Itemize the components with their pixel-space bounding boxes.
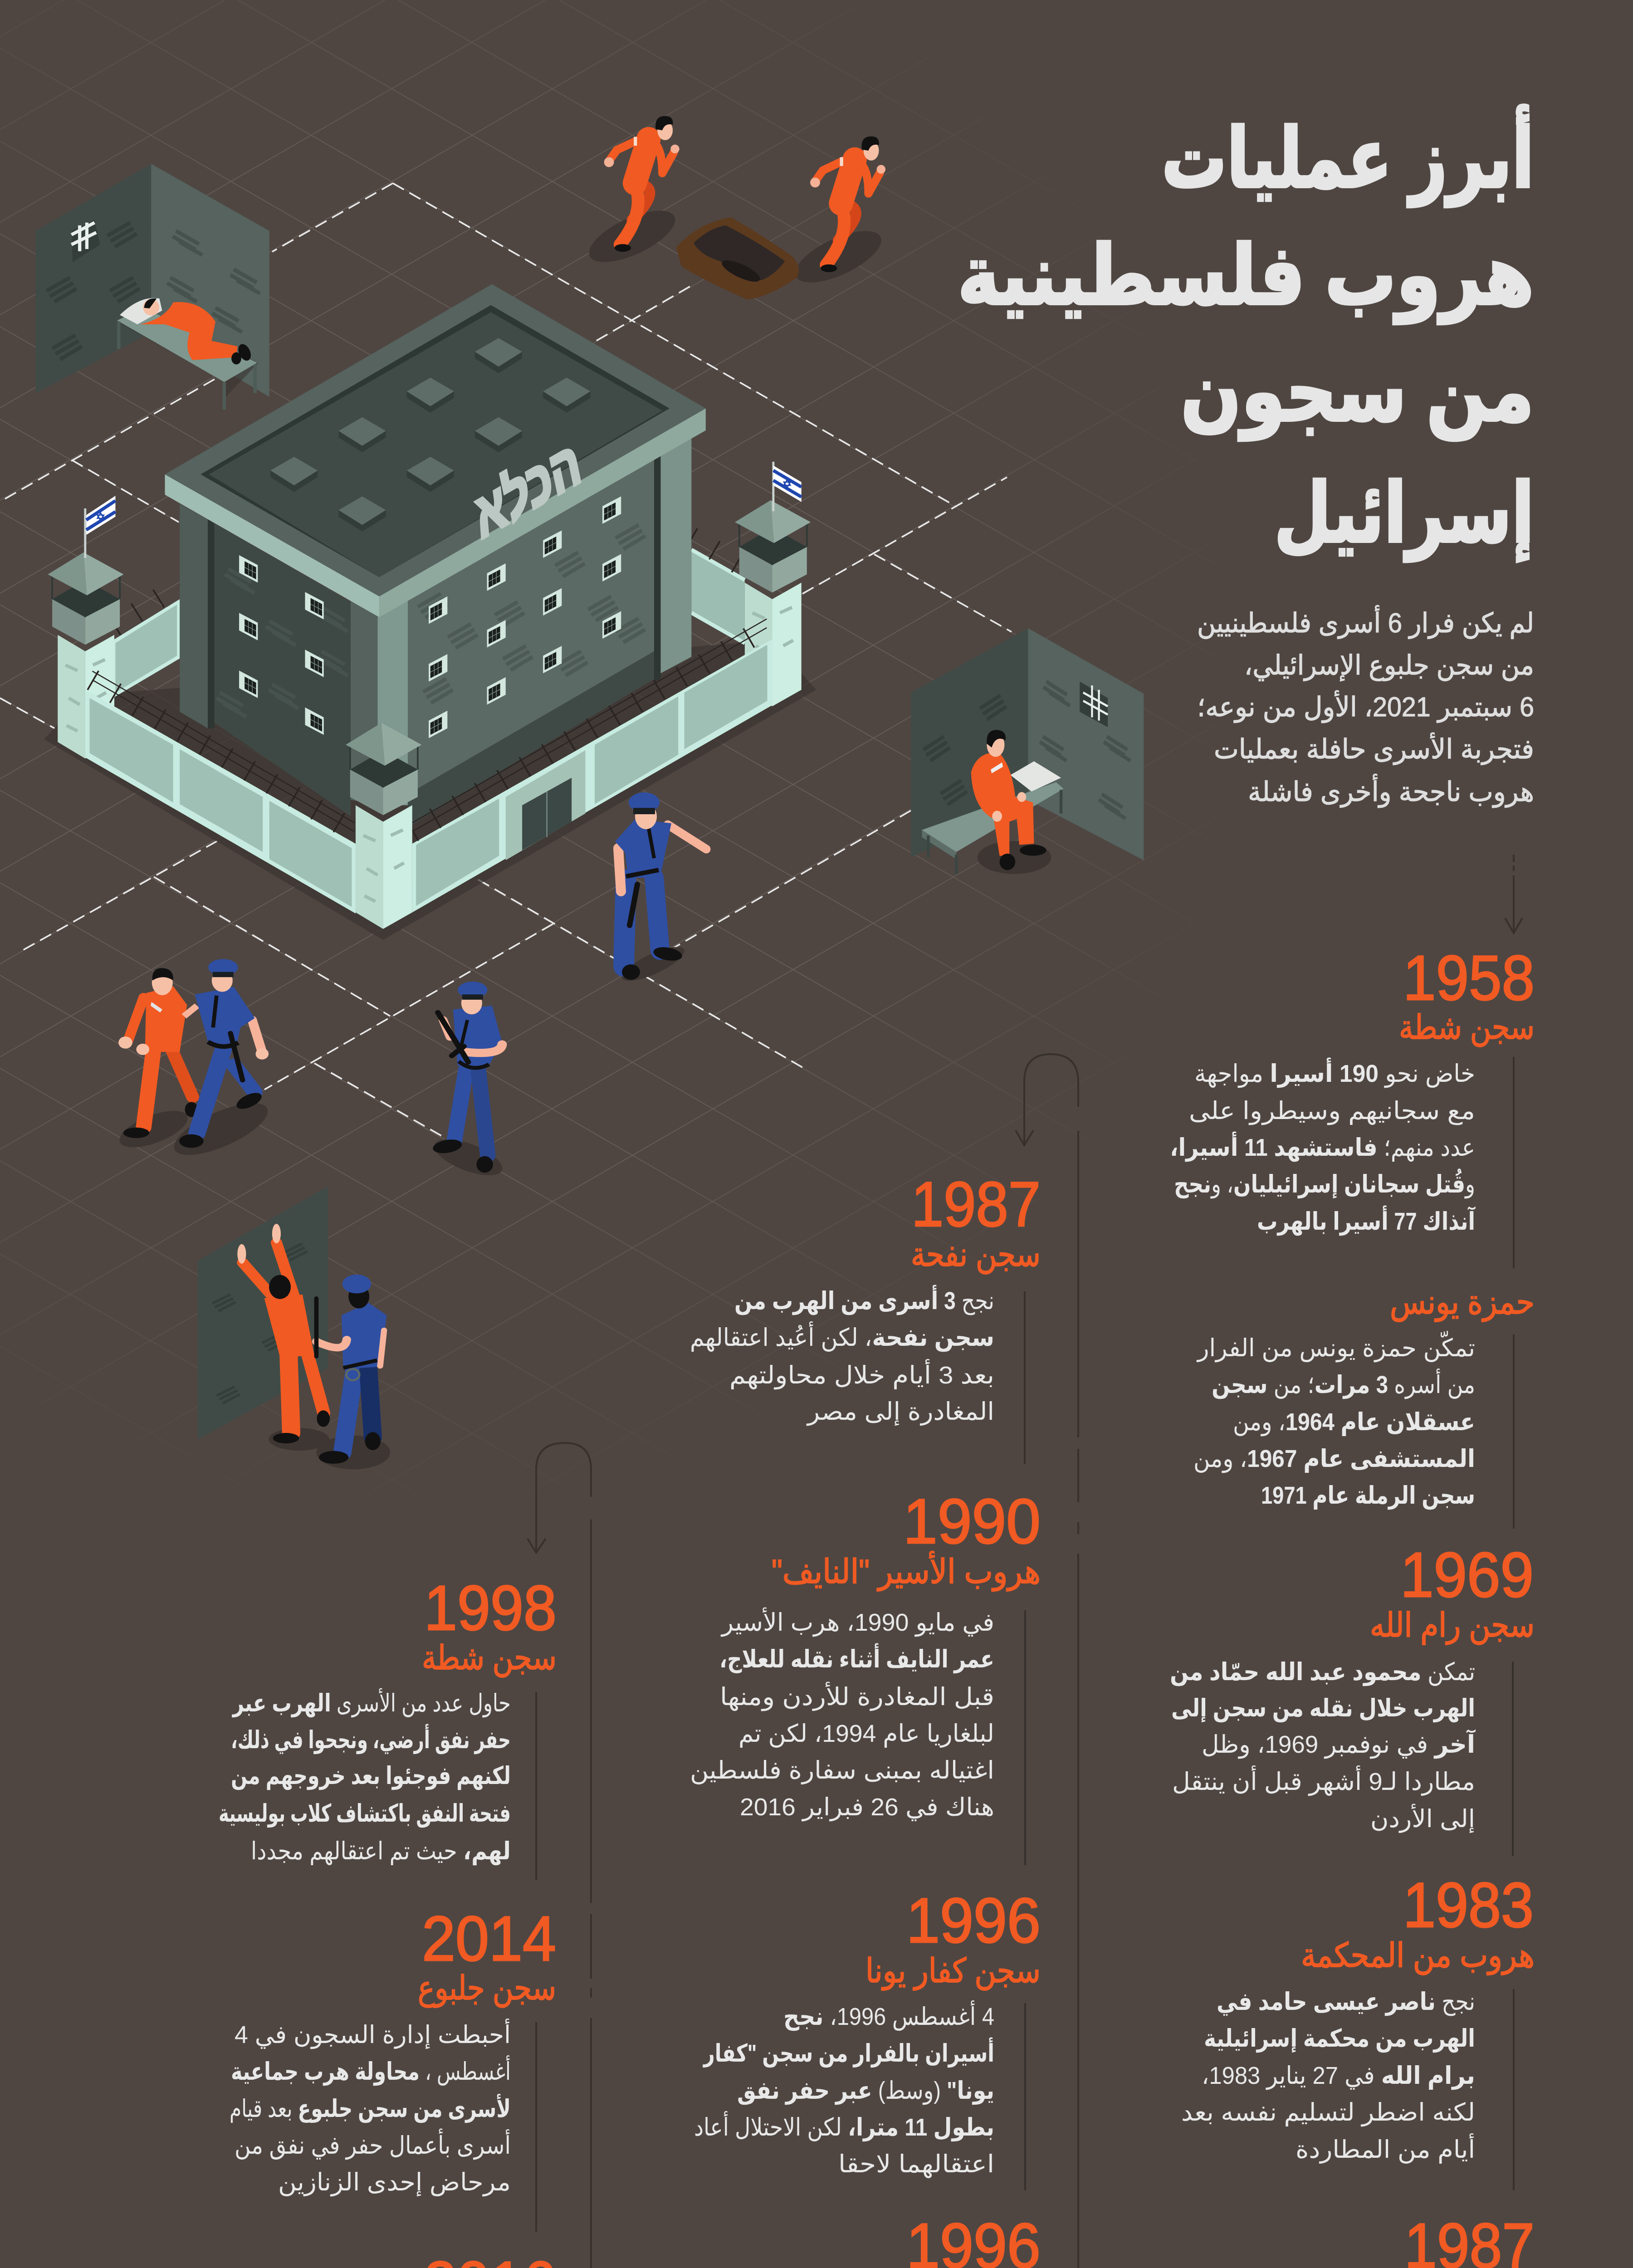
entry 1996: Kfar Yona prison: بطول 11 مترا، لكن الاحتلال أعاد: [694, 2111, 994, 2141]
entry 1958: Shatta prison: آنذاك 77 أسيرا بالهرب: [1257, 1205, 1476, 1236]
tunnel hole: [676, 217, 799, 299]
prison building: הכלא: [469, 427, 586, 552]
cell with seated prisoner: [911, 628, 1144, 874]
entry 1987: Nafha prison: 1987: [911, 1168, 1041, 1240]
title: أبرز عمليات: [1162, 105, 1534, 207]
entry: Hamza Younis: تمكّن حمزة يونس من الفرار: [1196, 1331, 1475, 1362]
running prisoners: [582, 116, 888, 293]
entry 1990: Al-Nayef: هروب الأسير "النايف": [772, 1551, 1041, 1591]
entry 1969: Ramallah prison: الهرب خلال نقله من سجن إلى: [1171, 1695, 1475, 1722]
entry 1998: Shatta prison: [219, 1572, 557, 1880]
entry 1996: Kfar Yona prison: [694, 1885, 1041, 2190]
entry 1983: court escape: 1983: [1403, 1869, 1534, 1941]
intro text: فتجربة الأسرى حافلة بعمليات: [1214, 733, 1534, 765]
entry 1969: Ramallah prison: [1170, 1539, 1535, 1856]
entry 1987: Nafha prison: سجن نفحة، لكن أعُيد اعتقالهم: [690, 1321, 994, 1352]
entry 1987: Nafha prison: نجح 3 أسرى من الهرب من: [734, 1285, 994, 1315]
prison building: [165, 284, 706, 827]
intro text: [1197, 605, 1534, 808]
timeline connector: middle column to left column: [528, 1443, 1026, 2268]
entry 2014: Gilboa prison: لأسرى من سجن جلبوع بعد قيام: [230, 2094, 511, 2123]
entry 1987: Nafha prison: [690, 1168, 1041, 1464]
entry: Hamza Younis: [1193, 1283, 1535, 1529]
entry: Hamza Younis: حمزة يونس: [1390, 1283, 1535, 1322]
intro text: من سجن جلبوع الإسرائيلي،: [1244, 650, 1534, 681]
entry 1983: court escape: [1181, 1869, 1535, 2190]
entry: Hamza Younis: من أسره 3 مرات؛ من سجن: [1212, 1369, 1475, 1399]
entry 1987: Nafha prison: بعد 3 أيام خلال محاولتهم: [729, 1359, 994, 1389]
front watch tower: [346, 723, 421, 929]
entry 1958: Shatta prison: عدد منهم؛ فاستشهد 11 أسيرا،: [1170, 1131, 1475, 1162]
entry 1990: Al-Nayef: هناك في 26 فبراير 2016: [740, 1794, 994, 1821]
entry 2014: Gilboa prison: أحبطت إدارة السجون في 4: [235, 2019, 511, 2049]
corner watch towers with flags: [48, 462, 811, 758]
intro text: لم يكن فرار 6 أسرى فلسطينيين: [1197, 605, 1534, 639]
arrow: intro to timeline: [1505, 855, 1522, 933]
entry 1958: Shatta prison: وقُتل سجانان إسرائيليان، ونجح: [1174, 1168, 1475, 1198]
entry 1969: Ramallah prison: سجن رام الله: [1370, 1606, 1535, 1645]
officer escorting handcuffed prisoner: [113, 959, 276, 1165]
entry 1983: court escape: نجح ناصر عيسى حامد في: [1217, 1988, 1475, 2016]
police officer with baton: [428, 982, 508, 1183]
officer searching prisoner at wall: [198, 1186, 390, 1469]
entry 1983: court escape: الهرب من محكمة إسرائيلية: [1204, 2025, 1475, 2053]
entry 2014: Gilboa prison: سجن جلبوع: [418, 1969, 556, 2008]
cell with sleeping prisoner: [36, 164, 269, 410]
entry 1996: Kfar Yona prison: أسيران بالفرار من سجن "كفار: [703, 2037, 994, 2068]
entry 1983: court escape: أيام من المطاردة: [1296, 2133, 1475, 2164]
entry 1996: Kfar Yona prison: يونا" (وسط) عبر حفر نفق: [737, 2077, 994, 2105]
entry 1958: Shatta prison: سجن شطة: [1399, 1008, 1535, 1047]
entry 1996: Kfar Yona prison: 4 أغسطس 1996، نجح: [783, 2000, 994, 2031]
entry 1998: Shatta prison: 1998: [424, 1572, 557, 1643]
entry 1969: Ramallah prison: تمكن محمود عبد الله حمّاد من: [1170, 1658, 1475, 1686]
entry 1996: Kfar Yona prison: 1996: [906, 1885, 1041, 1956]
entry 2014: Gilboa prison: أغسطس ، محاولة هرب جماعية: [231, 2055, 511, 2086]
entry 2014: Gilboa prison: أسرى بأعمال حفر في نفق من: [235, 2128, 511, 2160]
entry 1990: Al-Nayef: قبل المغادرة للأردن ومنها: [720, 1681, 994, 1711]
entry 1990: Al-Nayef: في مايو 1990، هرب الأسير: [720, 1607, 994, 1637]
front fence with razor wire and gate: [85, 619, 772, 914]
entry 1990: Al-Nayef: 1990: [903, 1486, 1041, 1557]
entry 1990: Al-Nayef: عمر النايف أثناء نقله للعلاج،: [719, 1643, 994, 1673]
timeline connector: right column to middle column: [1016, 1054, 1514, 2268]
entry: Hamza Younis: المستشفى عام 1967، ومن: [1193, 1445, 1475, 1473]
entry 1998: Shatta prison: حفر نفق أرضي، ونجحوا في ذلك،: [231, 1724, 511, 1754]
entry 1998: Shatta prison: لكنهم فوجئوا بعد خروجهم من: [231, 1762, 511, 1790]
entry 1983: court escape: برام الله في 27 يناير 1983،: [1202, 2062, 1475, 2090]
title: هروب فلسطينية: [958, 229, 1534, 324]
title: إسرائيل: [1274, 467, 1534, 562]
entry 1987: Nafha prison: سجن نفحة: [911, 1236, 1041, 1274]
intro text: 6 سبتمبر 2021، الأول من نوعه؛: [1197, 690, 1534, 723]
entry 2014: Gilboa prison: مرحاض إحدى الزنازين: [278, 2169, 511, 2196]
entry 1998: Shatta prison: لهم، حيث تم اعتقالهم مجددا: [251, 1838, 511, 1865]
entry 1969: Ramallah prison: إلى الأردن: [1370, 1804, 1475, 1833]
entry 1969: Ramallah prison: مطاردا لـ9 أشهر قبل أن ينتقل: [1172, 1765, 1475, 1796]
floor grid: [0, 0, 1136, 1408]
entry 1996: Kfar Yona prison: اعتقالهما لاحقا: [838, 2151, 994, 2178]
title: [958, 105, 1534, 562]
entry 1998: Shatta prison: فتحة النفق باكتشاف كلاب بوليسية: [219, 1800, 511, 1828]
dashed path lines: [0, 183, 1012, 1139]
entry 1958: Shatta prison: مع سجانيهم وسيطروا على: [1189, 1097, 1475, 1125]
title: من سجون: [1181, 346, 1534, 441]
entry 1996: Kfar Yona prison: سجن كفار يونا: [865, 1952, 1041, 1990]
fence shadow: [44, 640, 816, 940]
back fence panels: [112, 537, 745, 698]
entry: Hamza Younis: سجن الرملة عام 1971: [1261, 1482, 1475, 1510]
entry 1990: Al-Nayef: لبلغاريا عام 1994، لكن تم: [738, 1720, 994, 1748]
entry 1990: Al-Nayef: [690, 1486, 1041, 1865]
entry 1983: court escape: هروب من المحكمة: [1301, 1936, 1535, 1975]
entry 2014: Gilboa prison: [230, 1903, 556, 2232]
intro text: هروب ناجحة وأخرى فاشلة: [1248, 774, 1534, 808]
entry 1983: court escape: لكنه اضطر لتسليم نفسه بعد: [1181, 2099, 1475, 2126]
entry 1990: Al-Nayef: اغتياله بمبنى سفارة فلسطين: [690, 1757, 994, 1784]
illustration: prison complex and figures (upper left): [36, 116, 888, 940]
entry 1958: Shatta prison: 1958: [1403, 942, 1535, 1013]
entry 1987: Nafha prison: المغادرة إلى مصر: [806, 1398, 994, 1426]
entry 1958: Shatta prison: خاض نحو 190 أسيرا مواجهة: [1194, 1057, 1475, 1088]
entry: Hamza Younis: عسقلان عام 1964، ومن: [1233, 1408, 1475, 1436]
entry 1998: Shatta prison: سجن شطة: [422, 1639, 557, 1677]
entry 1969: Ramallah prison: 1969: [1400, 1539, 1534, 1610]
police officer pointing: [615, 792, 706, 987]
entry 1969: Ramallah prison: آخر في نوفمبر 1969، وظل: [1202, 1729, 1476, 1759]
entry 1958: Shatta prison: [1170, 942, 1535, 1268]
entry 1998: Shatta prison: حاول عدد من الأسرى الهرب عبر: [232, 1688, 511, 1717]
entry 2014: Gilboa prison: 2014: [422, 1903, 556, 1974]
